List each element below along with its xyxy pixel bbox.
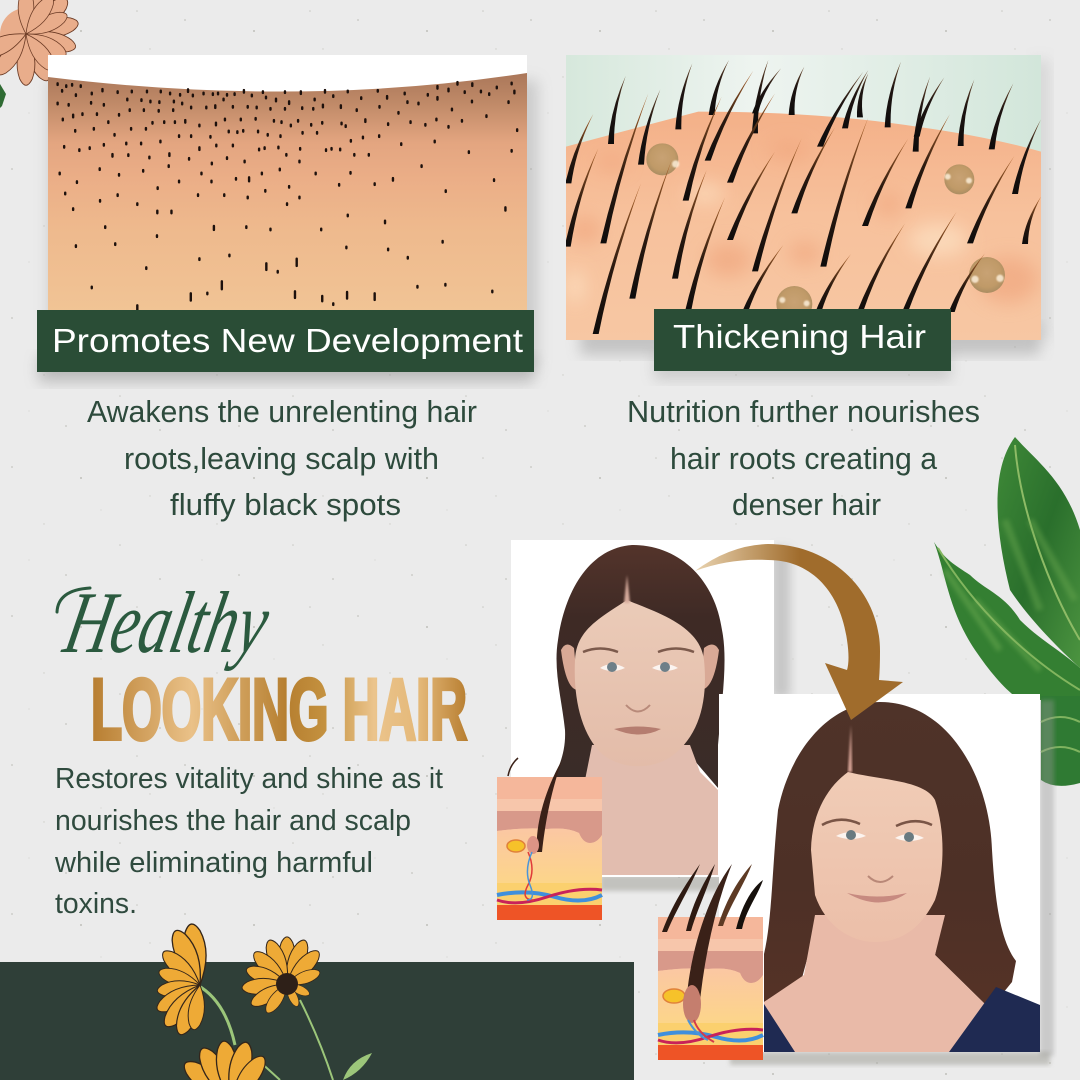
text block: restores vitality description: while eliminating harmful — [54, 847, 373, 879]
text block: thickening hair description: denser hair — [732, 487, 881, 522]
heading: healthy looking hair: LOOKING HAIR — [91, 662, 467, 758]
text block: thickening hair description: Nutrition further nourishes — [627, 394, 980, 429]
icon: green leaves — [934, 437, 1080, 786]
label: thickening hair — [654, 309, 951, 371]
heading: healthy looking hair: Healthy — [56, 575, 278, 672]
text block: thickening hair description: hair roots creating a — [670, 441, 938, 476]
icon: skin cross-section after — [658, 864, 763, 1060]
facial features: before — [583, 648, 694, 734]
text block: restores vitality description — [54, 763, 443, 920]
facial features: after — [822, 820, 932, 902]
text block: thickening hair description — [627, 394, 980, 522]
label: promotes new development: Promotes New Development — [52, 322, 523, 359]
icon: yellow flowers — [153, 923, 372, 1080]
text block: restores vitality description: toxins. — [55, 888, 137, 920]
panel: thickening hair — [563, 55, 1050, 380]
text block: promotes new development description: fluffy black spots — [170, 487, 401, 522]
label: thickening hair: Thickening Hair — [673, 318, 926, 355]
label: promotes new development — [37, 310, 534, 372]
dark green footer band — [0, 962, 634, 1080]
text block: restores vitality description: nourishes the hair and scalp — [55, 805, 411, 837]
icon: peach flower top-left — [0, 0, 80, 108]
heading: healthy looking hair — [56, 575, 467, 758]
scalp illustration with thick hair — [563, 55, 1044, 340]
arrow: before to after — [695, 544, 903, 720]
after photo: full hair portrait — [719, 694, 1054, 1065]
panel: promotes new development — [37, 55, 538, 383]
text block: promotes new development description: Awakens the unrelenting hair — [87, 394, 477, 429]
before photo: thinning hair portrait — [511, 540, 790, 891]
text block: promotes new development description: roots,leaving scalp with — [124, 441, 439, 476]
text block: promotes new development description — [87, 394, 477, 522]
icon: skin cross-section before — [497, 758, 602, 920]
scalp illustration with sparse hair dots — [48, 55, 527, 312]
text block: restores vitality description: Restores vitality and shine as it — [55, 763, 443, 795]
